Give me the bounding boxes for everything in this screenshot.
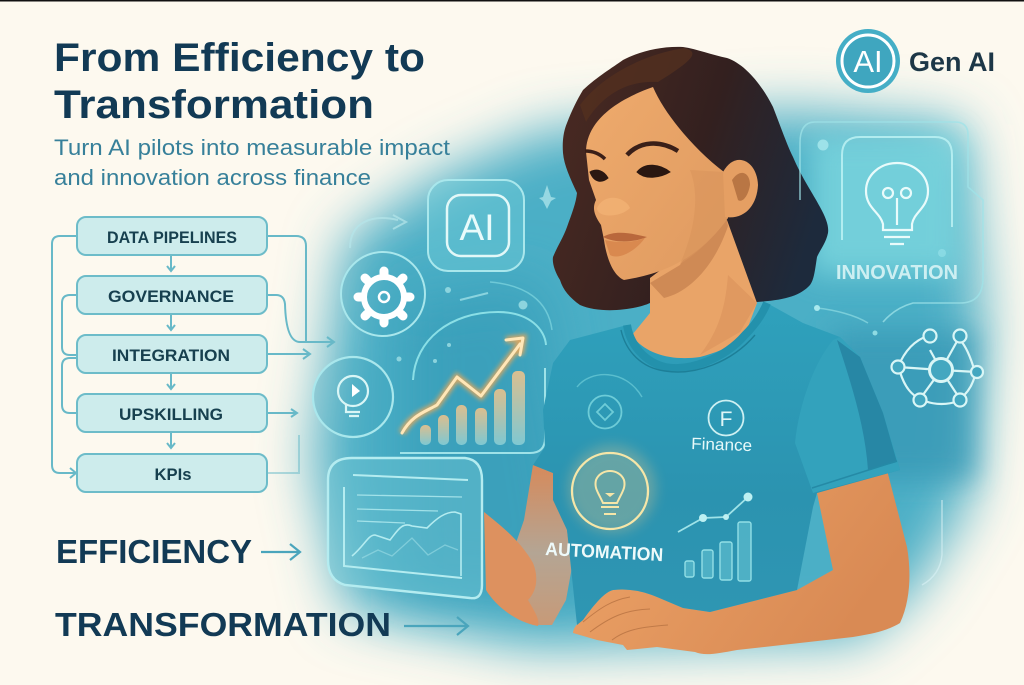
innovation label: INNOVATION <box>836 262 958 284</box>
person <box>484 47 909 654</box>
shirt icon: finance: F <box>720 408 732 431</box>
faint panel outline <box>922 500 942 585</box>
hair sheen <box>580 48 692 122</box>
hand fingers <box>583 597 668 640</box>
far arm and hand <box>573 470 909 654</box>
shirt icon: glowing bulb <box>568 445 656 533</box>
label: efficiency: EFFICIENCY <box>56 533 252 570</box>
box: upskilling: UPSKILLING <box>119 405 223 424</box>
neck <box>632 220 757 370</box>
subtitle <box>54 135 450 190</box>
shirt icon: mini bars <box>678 492 752 581</box>
icon: innovation bulb <box>866 163 928 244</box>
growth chart panel <box>396 282 552 453</box>
box: KPIs: KPIs <box>154 465 192 484</box>
automation label: AUTOMATION <box>545 538 664 565</box>
hair <box>553 47 828 310</box>
box: governance <box>77 276 267 314</box>
neck shadow <box>650 200 728 298</box>
subtitle: and innovation across finance <box>54 165 371 190</box>
box: data pipelines: DATA PIPELINES <box>107 228 237 247</box>
logo: Gen AI <box>836 29 995 93</box>
label: transformation: TRANSFORMATION <box>55 606 391 643</box>
logo: Gen AI: AI <box>853 44 883 79</box>
sleeve shade <box>837 340 897 470</box>
icon: AI panel: AI <box>460 207 494 248</box>
box: KPIs <box>77 454 267 492</box>
box: governance: GOVERNANCE <box>108 287 234 306</box>
box: data pipelines <box>77 217 267 255</box>
title line 2: Transformation <box>54 83 374 127</box>
near arm <box>510 465 572 625</box>
face <box>586 87 728 280</box>
sleeve <box>795 337 900 493</box>
title: From Efficiency to <box>54 36 425 80</box>
logo: Gen AI: Gen AI <box>909 47 995 77</box>
shirt icon: finance: Finance <box>691 435 752 455</box>
ear <box>723 160 758 217</box>
box: upskilling <box>77 394 267 432</box>
blue glow background <box>312 110 985 648</box>
cheek shade <box>680 170 728 264</box>
shirt icon: finance <box>691 400 752 455</box>
innovation panel <box>800 122 983 322</box>
small chart panel <box>328 458 482 598</box>
shirt icon: diamond <box>577 375 642 428</box>
icon: AI panel <box>428 180 524 271</box>
accent arc <box>814 305 878 336</box>
icon: gear <box>341 252 425 336</box>
box: integration: INTEGRATION <box>112 346 230 365</box>
icon: curved arrow <box>350 215 406 248</box>
box: integration <box>77 335 267 373</box>
icon: network <box>892 330 983 406</box>
flow diagram <box>52 217 334 492</box>
icon: sparkle <box>539 185 556 209</box>
icon: light bulb play <box>313 357 393 437</box>
collar <box>627 303 767 368</box>
shirt <box>533 303 900 625</box>
eyes, brows, nose, mouth <box>585 144 678 256</box>
subtitle: Turn AI pilots into measurable impact <box>54 135 450 160</box>
near hand <box>484 512 538 626</box>
